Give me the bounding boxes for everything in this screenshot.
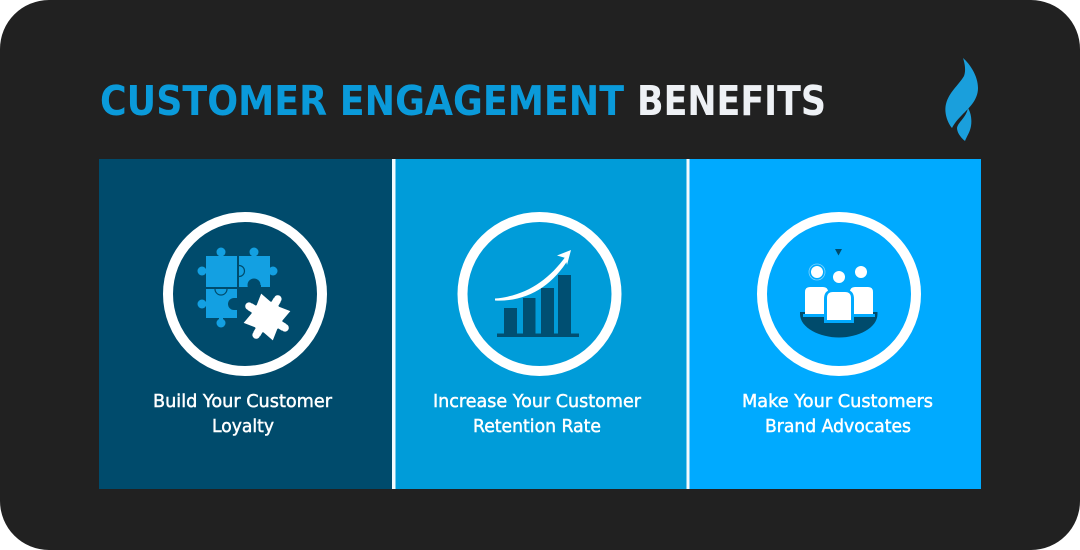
caption: brand advocates: Brand Advocates: [765, 417, 911, 437]
panel: brand advocates: [690, 159, 981, 489]
caption: build loyalty: Loyalty: [212, 417, 274, 437]
panel: increase retention: [396, 159, 686, 489]
icon: bar chart: [497, 275, 579, 337]
ring: loyalty: [168, 217, 322, 371]
icon: white puzzle piece: [233, 283, 301, 351]
icon: rising arrow: [495, 250, 571, 301]
title: CUSTOMER ENGAGEMENT: [100, 77, 624, 125]
ring: advocates: [762, 217, 916, 371]
caption: increase retention: [433, 392, 642, 437]
title: BENEFITS: [637, 77, 826, 125]
caption: increase retention: Increase Your Customer: [433, 392, 642, 412]
caption: build loyalty: [153, 392, 333, 437]
caption: increase retention: Retention Rate: [473, 417, 601, 437]
caption: brand advocates: Make Your Customers: [742, 392, 933, 412]
icon: puzzle pieces: [198, 248, 278, 328]
icon: flame logo: [945, 58, 978, 141]
icon: audience group: [800, 249, 878, 338]
panel: build loyalty: [99, 159, 392, 489]
panel separators: [391, 159, 690, 489]
caption: brand advocates: [742, 392, 933, 437]
ring: retention: [462, 217, 616, 371]
caption: build loyalty: Build Your Customer: [153, 392, 333, 412]
